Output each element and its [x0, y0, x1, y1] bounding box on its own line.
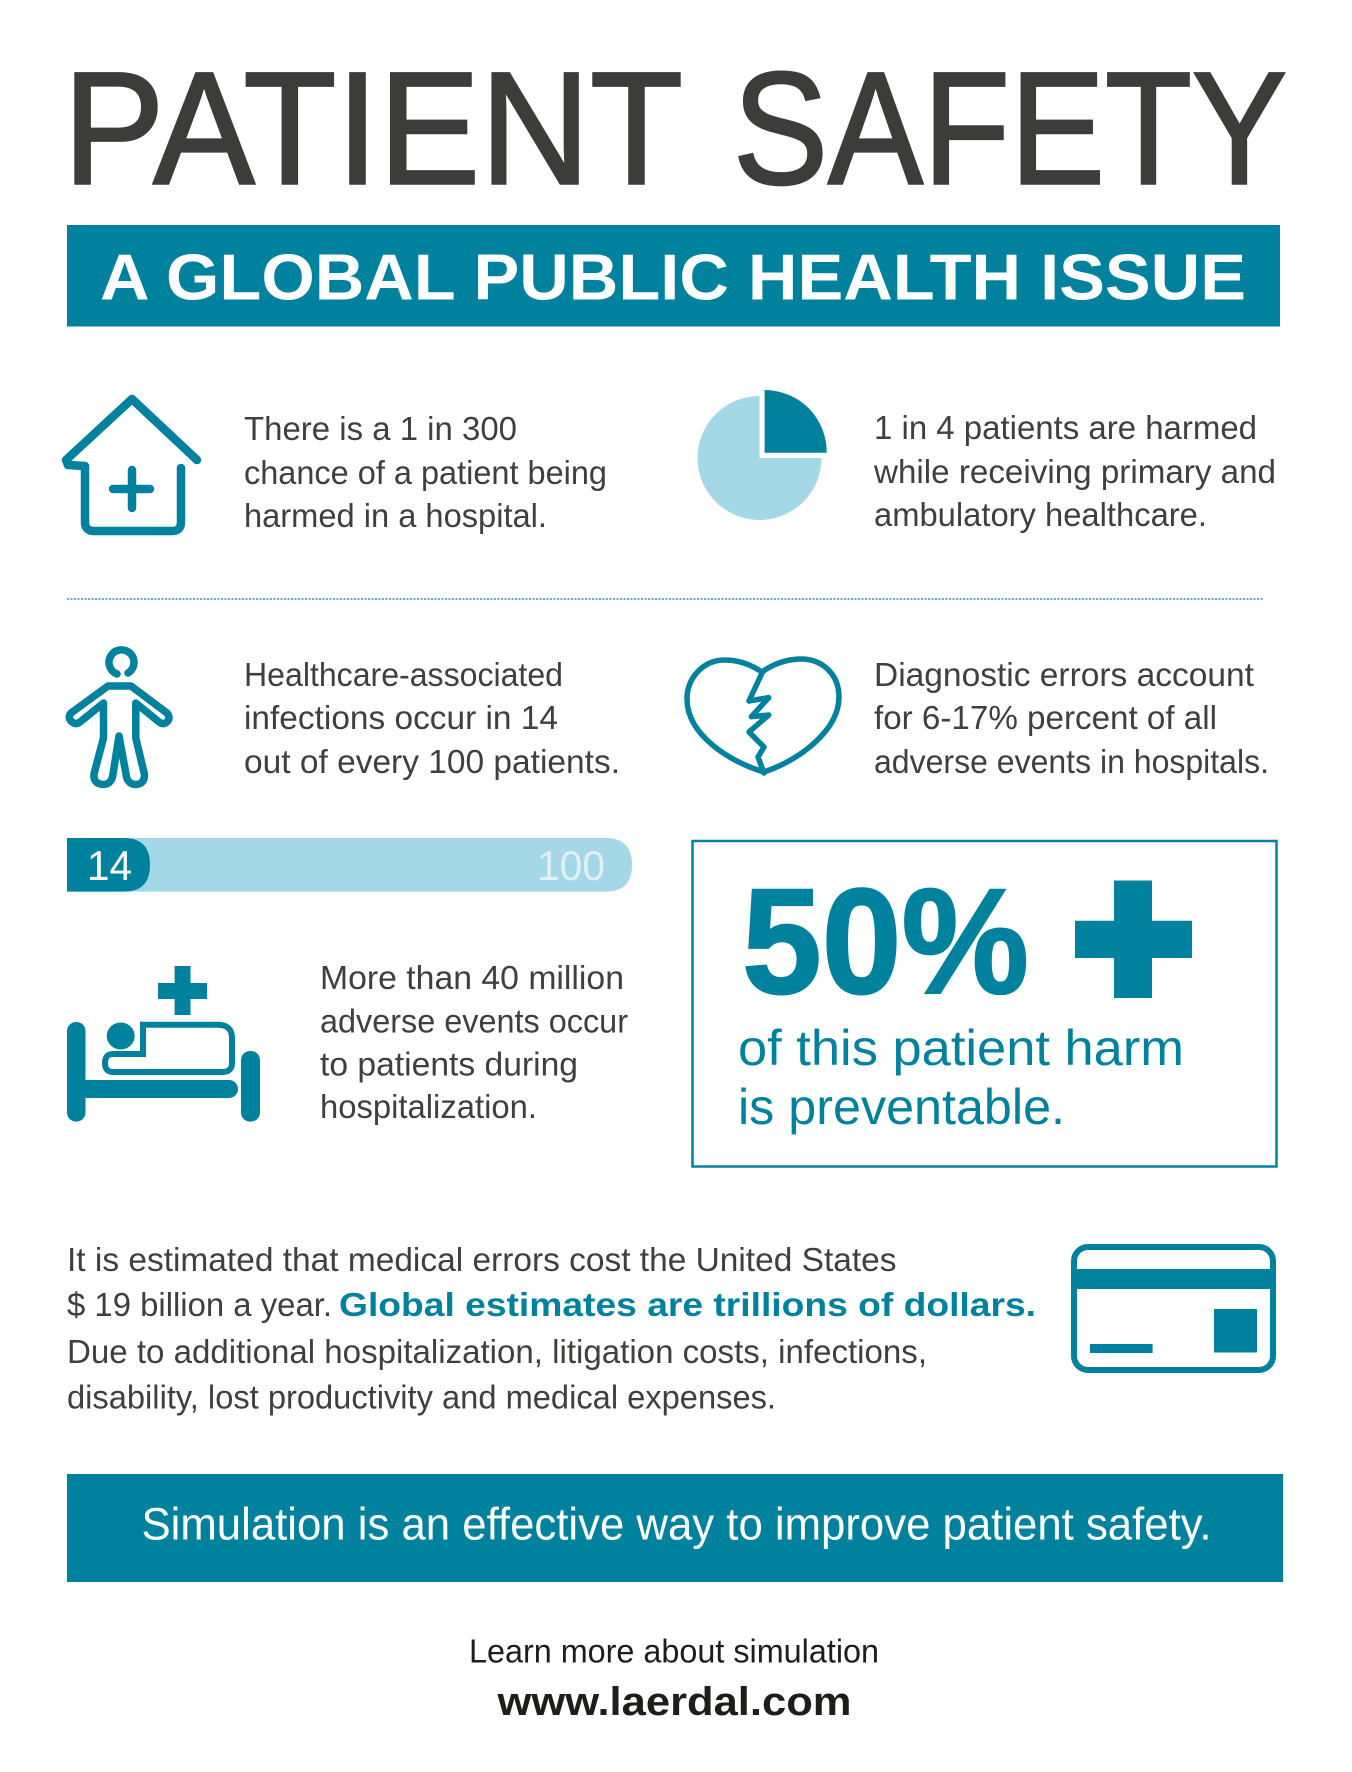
text: cost paragraph: It is estimated that medical errors cost the United States — [67, 1241, 896, 1278]
progress bar: 14 of 100: 100 — [537, 842, 605, 889]
icon: hospital bed — [67, 966, 260, 1122]
text: website: www.laerdal.com — [496, 1680, 852, 1724]
title — [63, 38, 1287, 218]
text: diagnostic errors — [874, 656, 1269, 780]
icon: large plus — [1075, 880, 1192, 998]
callout: 50% preventable: of this patient harm — [738, 1020, 1184, 1076]
text: 1 in 4 — [873, 409, 1276, 533]
banner: subtitle: A GLOBAL PUBLIC HEALTH ISSUE — [100, 241, 1246, 314]
text: 40 million: More than 40 million — [320, 959, 624, 996]
icon: hospital house — [66, 399, 197, 531]
text: 1 in 300 — [244, 410, 607, 534]
text: cost paragraph: $ 19 billion a year. — [67, 1286, 332, 1323]
banner: subtitle — [67, 225, 1280, 326]
text: infections — [244, 656, 620, 780]
progress bar: 14 of 100 — [67, 838, 632, 892]
text: infections: out of every 100 patients. — [244, 743, 620, 780]
title: SAFETY — [733, 38, 1287, 218]
text: diagnostic errors: for 6-17% percent of all — [874, 699, 1217, 736]
callout: 50% preventable — [692, 841, 1276, 1166]
icon: person — [69, 650, 169, 784]
text: 40 million — [320, 959, 628, 1125]
banner: simulation — [67, 1474, 1283, 1582]
text: 1 in 300: There is a 1 in 300 — [244, 410, 517, 447]
banner: simulation: Simulation is an effective way to improve patient safety. — [142, 1498, 1212, 1550]
callout: 50% preventable: is preventable. — [738, 1079, 1065, 1135]
text: cost paragraph: disability, lost productivity and medical expenses. — [67, 1379, 776, 1416]
text: 1 in 4: while receiving primary and — [873, 453, 1276, 490]
icon: credit card — [1072, 1247, 1276, 1370]
text: 40 million: adverse events occur — [320, 1002, 628, 1040]
text: infections: Healthcare-associated — [244, 656, 563, 693]
text: 1 in 300: harmed in a hospital. — [244, 497, 547, 534]
callout: 50% preventable: 50% — [742, 857, 1029, 1025]
text: cost paragraph — [67, 1241, 1036, 1416]
icon: pie chart one quarter — [698, 390, 827, 520]
text: cost paragraph: Global estimates are trillions of dollars. — [339, 1286, 1036, 1323]
text: 40 million: to patients during — [320, 1046, 578, 1083]
text: learn more: Learn more about simulation — [469, 1633, 879, 1670]
text: cost paragraph: Due to additional hospitalization, litigation costs, infections, — [67, 1333, 927, 1370]
text: 1 in 4: 1 in 4 patients are harmed — [874, 409, 1257, 446]
text: 1 in 4: ambulatory healthcare. — [874, 496, 1207, 533]
text: diagnostic errors: adverse events in hospitals. — [874, 743, 1269, 780]
text: diagnostic errors: Diagnostic errors account — [874, 656, 1254, 693]
progress bar: 14 of 100: 14 — [87, 842, 132, 889]
text: infections: infections occur in 14 — [244, 699, 558, 736]
text: 1 in 300: chance of a patient being — [244, 454, 607, 491]
icon: broken heart — [687, 659, 839, 773]
title: PATIENT — [63, 38, 683, 218]
text: 40 million: hospitalization. — [320, 1088, 537, 1125]
